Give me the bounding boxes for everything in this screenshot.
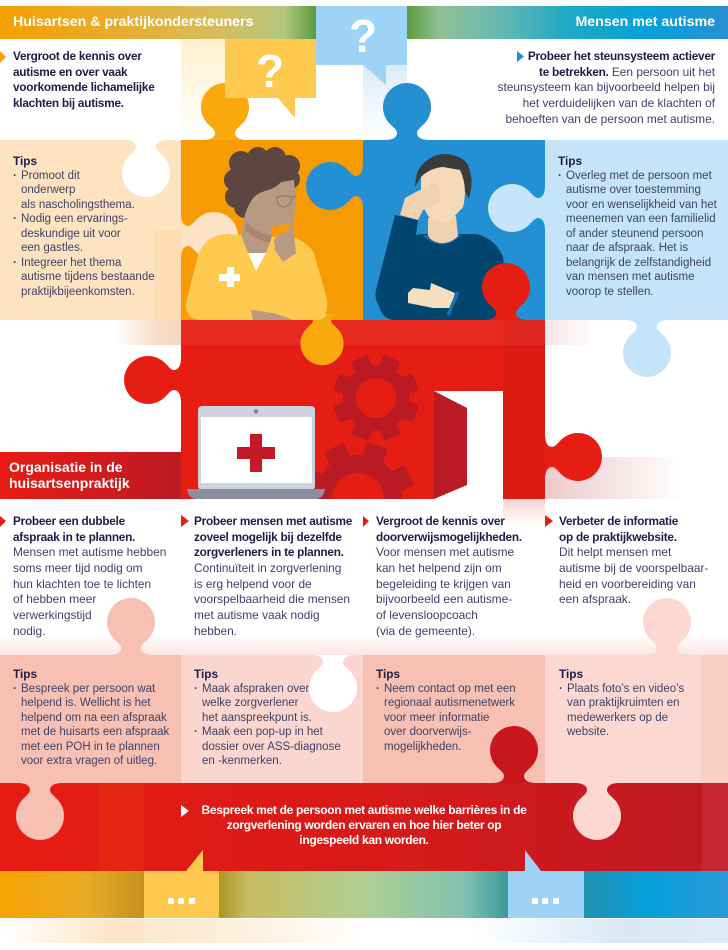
hair [415, 154, 472, 199]
text column 4 [559, 514, 708, 606]
icon: gears [314, 356, 418, 499]
text column 4: autisme bij de voorspelbaar- [559, 561, 708, 575]
text: steunsysteem [498, 49, 716, 126]
tips column 1: helpend is. Wellicht is het [21, 697, 151, 709]
heading: Mensen met autisme: Mensen met autisme [575, 14, 715, 30]
tips: mensen met autisme: belangrijk de zelfstandigheid [566, 257, 711, 269]
tips: huisartsen: Promoot dit [21, 170, 80, 182]
hair [224, 147, 300, 218]
text column 4: Verbeter de informatie [559, 514, 678, 528]
heading: Organisatie in de huisartsenpraktijk: Organisatie in de [9, 459, 123, 475]
speech bubble: blue question mark: ? [349, 10, 377, 62]
text column 2: zorgverleners in te plannen. [194, 545, 344, 559]
tips column 3: mogelijkheden. [384, 741, 461, 753]
lap [251, 310, 293, 320]
tips column 3: Tips [376, 667, 400, 681]
tips column 3: voor meer informatie [384, 712, 489, 724]
tips column 1: met de huisarts een afspraak [21, 726, 169, 738]
text column 2: voorspelbaarheid die mensen [194, 592, 350, 606]
text: kennis vergroten: klachten bij autisme. [13, 96, 124, 110]
text column 3: doorverwijsmogelijkheden. [376, 530, 522, 544]
text column 1: nodig. [13, 624, 45, 638]
text column 4: Dit helpt mensen met [559, 545, 671, 559]
icon: laptop with cross [187, 406, 325, 499]
tips: mensen met autisme: van mensen met autisme [566, 271, 694, 283]
tips column 1: voor extra vragen of uitleg. [21, 755, 157, 767]
soft fades behind top text [0, 39, 728, 655]
body [186, 234, 327, 320]
text column 2: is erg helpend voor de [194, 577, 312, 591]
tips: huisartsen: onderwerp [21, 184, 75, 196]
puzzle piece: orange [181, 83, 363, 320]
tips column 1: met een POH in te plannen [21, 741, 160, 753]
tips column 4: Plaats foto’s en video’s [567, 683, 684, 695]
text column 3: (via de gemeente). [376, 624, 475, 638]
callout: barrières bespreken: ingespeeld kan worden. [299, 833, 429, 847]
raised hand [400, 182, 440, 220]
face and neck [241, 180, 296, 253]
tips: mensen met autisme: autisme over toestemming [566, 184, 701, 196]
hand [274, 224, 296, 262]
tips: mensen met autisme: Tips [558, 154, 582, 168]
text column 4: op de praktijkwebsite. [559, 530, 677, 544]
callout: barrières bespreken: Bespreek met de persoon met autisme welke barrières in de [201, 803, 527, 817]
tips column 2: welke zorgverlener [202, 697, 299, 709]
puzzle piece: light blue tips panel [545, 140, 728, 377]
tips: mensen met autisme: voorop te stellen. [566, 286, 654, 298]
speech bubble: yellow dots [144, 850, 219, 918]
tips: huisartsen: Nodig een ervarings- [21, 213, 128, 225]
speech bubble: blue question mark [316, 6, 407, 85]
tips column 3: regionaal autismenetwerk [384, 697, 515, 709]
text: steunsysteem: te betrekken. Een persoon uit het [539, 65, 715, 79]
text column 2: hebben. [194, 624, 237, 638]
puzzle piece: red bottom band [0, 726, 728, 871]
tips column 1 [13, 667, 170, 767]
text column 3: bijvoorbeeld een autisme- [376, 592, 512, 606]
heading: Huisartsen & praktijkondersteuners: Huisartsen & praktijkondersteuners [13, 14, 253, 30]
text column 3: begeleiding te krijgen van [376, 577, 511, 591]
tips column 4: van praktijkruimten en [567, 697, 680, 709]
neck [428, 216, 458, 243]
text: kennis vergroten: Vergroot de kennis over [13, 49, 142, 63]
text column 3: kan het helpend zijn om [376, 561, 502, 575]
text column 3: of levensloopcoach [376, 608, 478, 622]
tips column 1: Bespreek per persoon wat [21, 683, 155, 695]
puzzle piece: light orange tips panel [0, 140, 181, 320]
fade strips next to the red piece [115, 320, 685, 525]
knob of the tips panel into orange piece [181, 212, 238, 260]
tips column 3: over doorverwijs- [384, 726, 472, 738]
tips: huisartsen: praktijkbijeenkomsten. [21, 286, 135, 298]
puzzle piece: blue [306, 83, 545, 320]
text: steunsysteem: behoeften van de persoon met autisme. [505, 112, 715, 126]
tips: mensen met autisme: Overleg met de persoon met [566, 170, 712, 182]
callout: barrières bespreken: zorgverlening worden ervaren en hoe hier beter op [227, 818, 501, 832]
speech bubble: yellow question mark [225, 39, 316, 118]
text column 1: of hebben meer [13, 592, 96, 606]
text: kennis vergroten [13, 49, 155, 110]
tips: mensen met autisme: naar de afspraak. Het is [566, 242, 688, 254]
collar [423, 235, 462, 244]
person: man with autism [375, 154, 510, 320]
tips column 2: Maak een pop-up in het [202, 726, 323, 738]
text column 2: zoveel mogelijk bij dezelfde [194, 530, 342, 544]
text column 2: met autisme vaak nodig [194, 608, 320, 622]
person: general practitioner [186, 147, 327, 320]
yellow body bottom over knob base [300, 314, 326, 320]
tips: mensen met autisme: of ander steunend persoon [566, 228, 703, 240]
text column 4: heid en voorbereiding van [559, 577, 696, 591]
heading band: Organisatie background [0, 452, 181, 499]
text column 4: een afspraak. [559, 592, 631, 606]
puzzle piece: red organisation [124, 263, 602, 499]
lower hand [408, 283, 455, 308]
tips: huisartsen: Integreer het thema [21, 257, 121, 269]
text column 2 [194, 514, 352, 638]
tips column 1: Tips [13, 667, 37, 681]
sweater [375, 215, 510, 320]
callout: barrières bespreken [201, 803, 527, 847]
text: steunsysteem: Probeer het steunsysteem actiever [528, 49, 715, 63]
heading band: Huisartsen [0, 6, 316, 39]
text column 3: Vergroot de kennis over [376, 514, 505, 528]
icon: door [434, 391, 503, 499]
lower tips panels [0, 598, 728, 783]
heading: Organisatie in de huisartsenpraktijk [9, 459, 130, 491]
text column 1: afspraak in te plannen. [13, 530, 135, 544]
collar [248, 253, 266, 271]
tips column 2: en -kenmerken. [202, 755, 282, 767]
tips column 2: het aanspreekpunt is. [202, 712, 312, 724]
speech bubble: blue dots [508, 850, 584, 918]
tips: huisartsen: als nascholingsthema. [21, 199, 135, 211]
tips: huisartsen: deskundige uit voor [21, 228, 121, 240]
text column 1: Mensen met autisme hebben [13, 545, 166, 559]
tips column 2: Tips [194, 667, 218, 681]
tips: mensen met autisme [558, 154, 717, 298]
heading: Organisatie in de huisartsenpraktijk: huisartsenpraktijk [9, 475, 130, 491]
text column 3 [376, 514, 522, 638]
tips: huisartsen: een gastles. [21, 242, 83, 254]
text column 1: hun klachten toe te lichten [13, 577, 151, 591]
text: steunsysteem: steunsysteem kan bijvoorbeeld helpen bij [498, 80, 715, 94]
tips: huisartsen [13, 154, 155, 298]
face [421, 167, 465, 222]
tips column 3: Neem contact op met een [384, 683, 516, 695]
tips column 4: medewerkers op de [567, 712, 668, 724]
bottom colour band [0, 871, 728, 943]
text column 1: Probeer een dubbele [13, 514, 125, 528]
tips column 3 [376, 667, 516, 753]
cuff [448, 292, 458, 315]
tips column 1: helpend om na een afspraak [21, 712, 167, 724]
tips column 4 [559, 667, 684, 738]
text: steunsysteem: het verduidelijken van de klachten of [523, 96, 715, 110]
glasses [277, 196, 296, 207]
tips column 4: website. [567, 726, 609, 738]
tips column 2 [194, 667, 341, 767]
tips column 2: Maak afspraken over [202, 683, 309, 695]
text column 1 [13, 514, 166, 638]
text column 3: Voor mensen met autisme [376, 545, 514, 559]
bullet arrows [0, 51, 553, 817]
text column 1: soms meer tijd nodig om [13, 561, 143, 575]
tips: huisartsen: autisme tijdens bestaande [21, 271, 155, 283]
text: kennis vergroten: autisme en over vaak [13, 65, 127, 79]
tips column 2: dossier over ASS-diagnose [202, 741, 341, 753]
text: kennis vergroten: voorkomende lichamelijke [13, 80, 155, 94]
text column 1: verwerkingstijd [13, 608, 92, 622]
tips: mensen met autisme: voor en wenselijkheid van het [566, 199, 717, 211]
tips: huisartsen: Tips [13, 154, 37, 168]
text column 2: Probeer mensen met autisme [194, 514, 352, 528]
cross [219, 267, 240, 287]
speech bubble: yellow question mark: ? [256, 45, 284, 97]
text column 2: Continuïteit in zorgverlening [194, 561, 341, 575]
tips column 4: Tips [559, 667, 583, 681]
heading band: Mensen met autisme [407, 6, 728, 39]
tips: mensen met autisme: meenemen van een familielid [566, 213, 716, 225]
